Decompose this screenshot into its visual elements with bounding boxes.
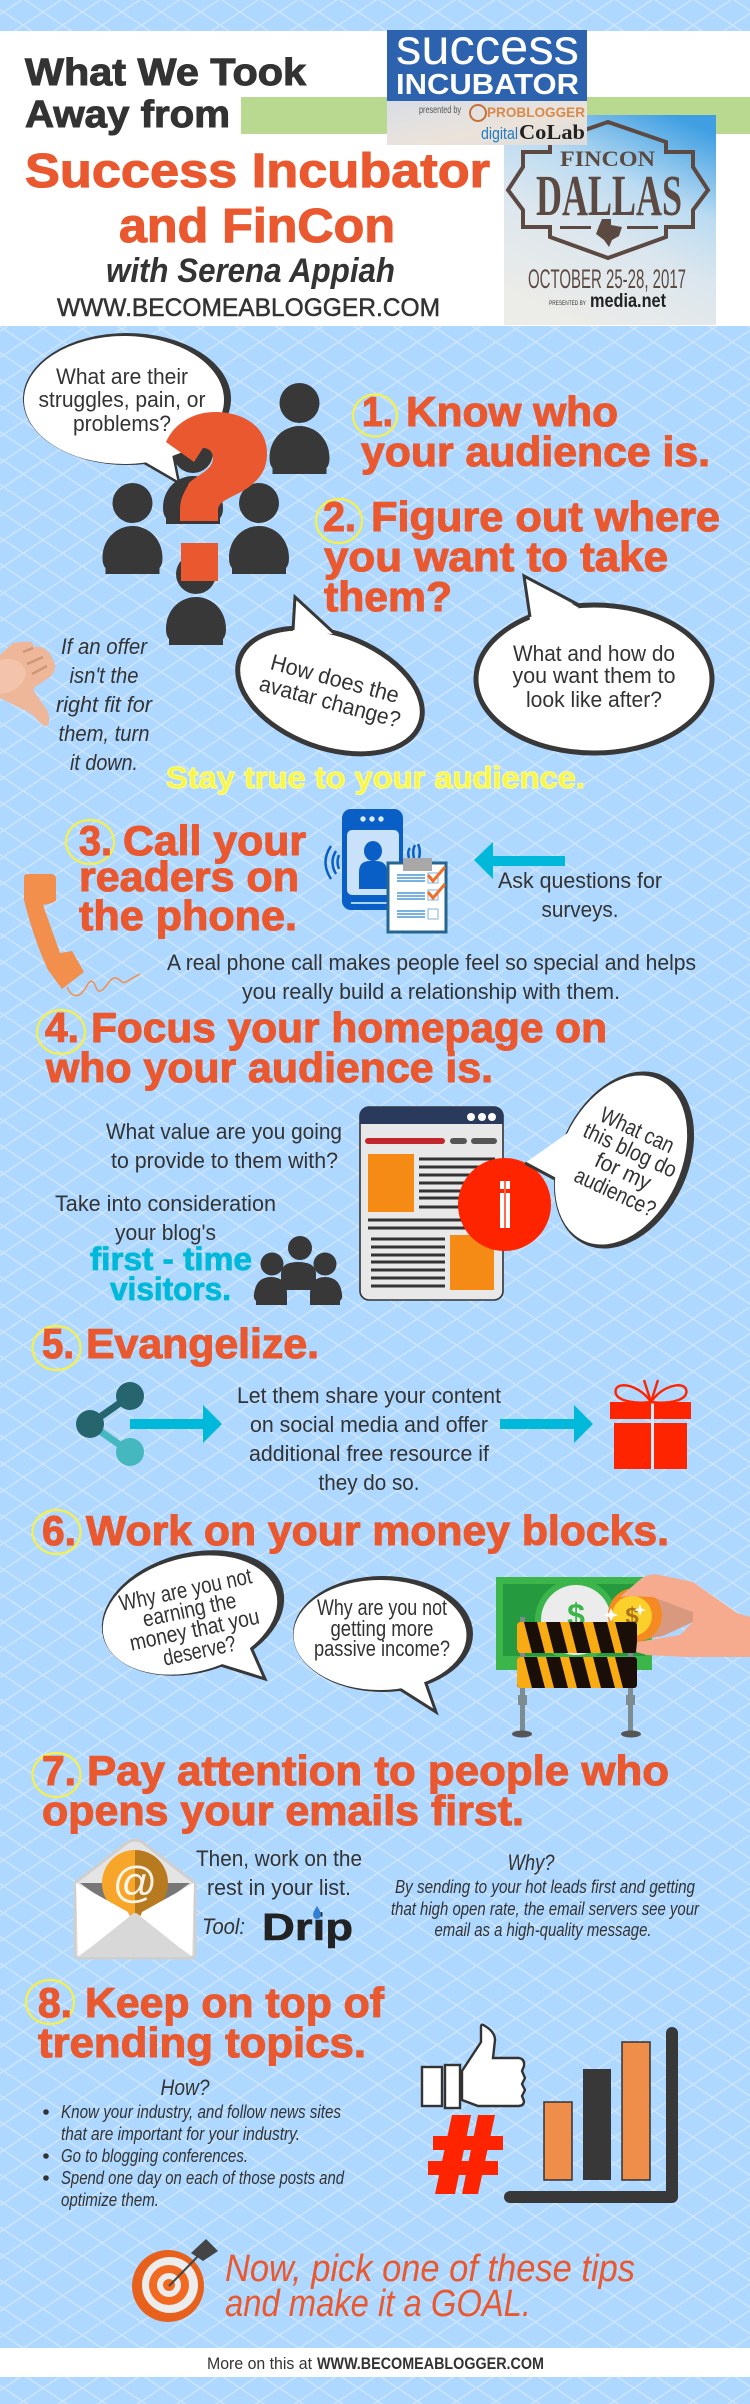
speech bubble: what can this blog do [525,1049,721,1271]
speech bubble: avatar change: How does the [268,650,402,708]
person right [229,483,289,574]
banknote [496,1577,652,1670]
text block: work on the rest: rest in your list. [207,1875,351,1900]
heading: step 8: 8. [38,1979,72,2026]
icon: share nodes [76,1382,144,1466]
icon: audience people with question mark and speech bubble [23,333,330,645]
icon: visitor group [254,1236,342,1305]
image: success incubator logo: INCUBATOR [396,69,579,101]
speech bubble: passive income: passive income? [314,1636,450,1661]
speech bubble: avatar change: avatar change? [257,671,403,733]
text block: real phone call: you really build a relationship with them. [242,979,620,1004]
speech bubble: earning the money: deserve? [161,1631,238,1671]
heading: step 1: your audience is. [361,428,710,475]
heading: step 7: 7. [42,1747,76,1794]
heading: step 2: Figure out where [371,493,720,540]
speech bubble: what can this blog do: this blog do [580,1118,681,1183]
text block: real phone call [167,950,696,1004]
panel: footer: WWW.BECOMEABLOGGER.COM [317,2354,544,2373]
heading: step 7: Pay attention to people who [87,1747,669,1794]
speech bubble: look like after: look like after? [526,687,662,712]
heading: step 1: Know who [406,388,618,435]
icon: telephone handset [24,874,140,996]
heading: step 8: trending topics. [38,2019,366,2066]
speech bubble: passive income: Why are you not [317,1595,448,1620]
heading: step 4 [37,1004,607,1091]
heading: step 3: Call your [123,817,306,864]
speech bubble: earning the money: money that you [127,1604,262,1656]
panel: footer: More on this at [207,2354,312,2373]
image: success incubator logo [387,19,587,145]
icon: money behind barricade [496,1574,750,1738]
subheading: with serena appiah: with Serena Appiah [106,252,395,290]
image: success incubator logo: PROBLOGGER [487,104,585,120]
text block: first-time visitors: visitors. [110,1271,231,1307]
heading: step 8 [26,1979,385,2066]
icon: email envelope: @ [113,1858,157,1907]
heading: step 3: readers on [79,853,299,900]
text block: first-time visitors: first - time [90,1241,252,1277]
speech bubble: what can this blog do: for my [591,1147,656,1195]
image: fincon dallas poster: media.net [590,291,667,312]
text block: turn down offers: them, turn [58,721,150,746]
heading: step 8: Keep on top of [85,1979,385,2026]
text block: share your content: Let them share your content [237,1383,502,1408]
heading: step 6: Work on your money blocks. [86,1507,669,1554]
speech bubble: struggles: What are their [56,364,188,389]
icon: thumbs down [0,642,55,726]
speech bubble: earning the money [88,1531,298,1695]
icon: question mark [166,412,267,581]
heading: step 1 [353,388,710,475]
image: fincon dallas poster: FINCON [560,146,655,171]
speech bubble: earning the money: Why are you not [117,1563,255,1616]
icon: phone survey with clipboard [326,809,446,932]
image: success incubator logo: CoLab [519,120,585,144]
callout: make it a goal: Now, pick one of these tips [225,2248,635,2290]
text block: what value: What value are you going [106,1119,342,1144]
image: success incubator logo: presented by [419,105,461,116]
text block: what value: to provide to them with? [111,1148,338,1173]
text block: how list: Know your industry, and follow news sites [61,2102,341,2122]
tool: drip logo [202,1906,353,1949]
heading: step 3: 3. [79,817,112,864]
banknote: $ [567,1597,585,1633]
heading: step 2: you want to take [324,533,668,580]
callout: make it a goal [225,2248,635,2325]
heading: step 4: 4. [45,1004,79,1051]
speech bubble: struggles [23,333,231,483]
heading: step 4: Focus your homepage on [91,1004,607,1051]
text block: ask questions: Ask questions for [498,868,662,893]
text block: why: email as a high-quality message. [434,1920,652,1940]
icon: thumbs up [422,2025,525,2108]
hand palm shadow [640,1597,693,1640]
gold coin [608,1588,662,1642]
heading: step 3 [66,817,306,939]
speech bubble: struggles: problems? [73,411,171,436]
panel: footer [0,2348,750,2377]
text block: how list [43,2075,345,2210]
text block: work on the rest [196,1846,362,1900]
image: fincon dallas poster: PRESENTED BY [549,301,586,307]
hand holding coin [620,1574,750,1657]
text block: work on the rest: Then, work on the [196,1846,362,1871]
heading: and fincon: and FinCon [119,200,395,253]
text block: turn down offers: isn't the [70,663,138,688]
speech bubble: struggles: struggles, pain, or [38,387,206,412]
text block: first-time visitors: your blog's [115,1220,216,1245]
speech bubble: what can this blog do: What can [596,1102,678,1158]
heading: step 7: opens your emails first. [42,1787,524,1834]
gold coin: $ [625,1603,639,1630]
person left [102,483,162,574]
person top right [270,383,330,474]
heading: step 2: them? [324,573,452,620]
speech bubble: look like after [476,576,712,753]
callout: make it a goal: and make it a GOAL. [225,2283,531,2325]
bar chart [510,2033,672,2197]
barricade plank upper [510,1622,637,1653]
speech bubble: earning the money: earning the [140,1588,239,1632]
arrow: text to gift [500,1405,593,1443]
speech bubble: passive income: getting more [330,1616,434,1641]
text block: turn down offers: If an offer [61,634,148,659]
icon: browser page with info badge [360,1107,551,1300]
text block: turn down offers: right fit for [56,692,153,717]
icon: gift box [610,1380,691,1469]
text block: what value [106,1119,342,1173]
text block: why: By sending to your hot leads first and getting [395,1877,695,1897]
text block: first-time visitors [55,1191,276,1307]
image: success incubator logo: success [396,19,579,75]
arrow: left to survey [474,842,565,879]
speech bubble: passive income [293,1576,473,1712]
panel: header [0,19,750,326]
site address: WWW.BECOMEABLOGGER.COM [57,294,440,322]
barricade plank lower [510,1657,637,1688]
text block: first-time visitors: Take into consideration [55,1191,276,1216]
heading: step 5: Evangelize. [86,1320,319,1367]
tool: drip logo: Drip [262,1907,353,1949]
text block: ask questions: surveys. [542,897,618,922]
icon: hashtag [428,2115,503,2194]
info badge [458,1158,551,1251]
icon: email envelope [75,1840,195,1958]
speech bubble: avatar change [220,597,440,777]
tool: drip logo: Tool: [202,1914,245,1939]
heading: step 3: the phone. [79,892,297,939]
icon: target with dart [132,2239,218,2322]
heading: step 5: 5. [42,1320,74,1367]
sparkles [604,1604,646,1622]
heading: what we took: What We Took [25,52,307,94]
text block: why: Why? [508,1850,555,1875]
callout: stay true: Stay true to your audience. [166,760,585,795]
heading: step 2: 2. [323,493,356,540]
text block: real phone call: A real phone call makes people feel so special and helps [167,950,696,975]
text block: how list: Go to blogging conferences. [61,2146,248,2166]
text block: turn down offers: it down. [70,750,138,775]
text block: how list: How? [160,2075,210,2100]
person back centre [163,433,223,524]
text block: why [391,1850,700,1940]
text block: share your content: additional free resource if [249,1441,490,1466]
text block: how list: that are important for your industry. [61,2124,300,2144]
text block: turn down offers [56,634,153,775]
speech bubble: look like after: you want them to [512,663,676,688]
heading: step 4: who your audience is. [45,1044,493,1091]
text block: how list: optimize them. [61,2190,159,2210]
speech bubble: look like after: What and how do [513,641,675,666]
person bottom [166,554,226,645]
barricade posts [512,1617,641,1738]
heading: step 2 [316,493,720,620]
heading: success incubator: Success Incubator [25,145,490,198]
speech bubble: what can this blog do: audience? [570,1162,660,1222]
heading: step 6: 6. [42,1507,76,1554]
text block: share your content: on social media and offer [250,1412,488,1437]
text block: ask questions [498,868,662,922]
heading: away from: Away from [25,94,230,136]
image: success incubator logo: digital [481,124,518,143]
heading: step 7 [32,1747,669,1834]
text block: share your content: they do so. [318,1470,420,1495]
image: fincon dallas poster [504,115,716,325]
heading: step 1: 1. [362,388,393,435]
arrow: share to text [130,1405,222,1443]
text block: share your content [237,1383,502,1495]
text block: how list: Spend one day on each of those posts and [61,2168,345,2188]
